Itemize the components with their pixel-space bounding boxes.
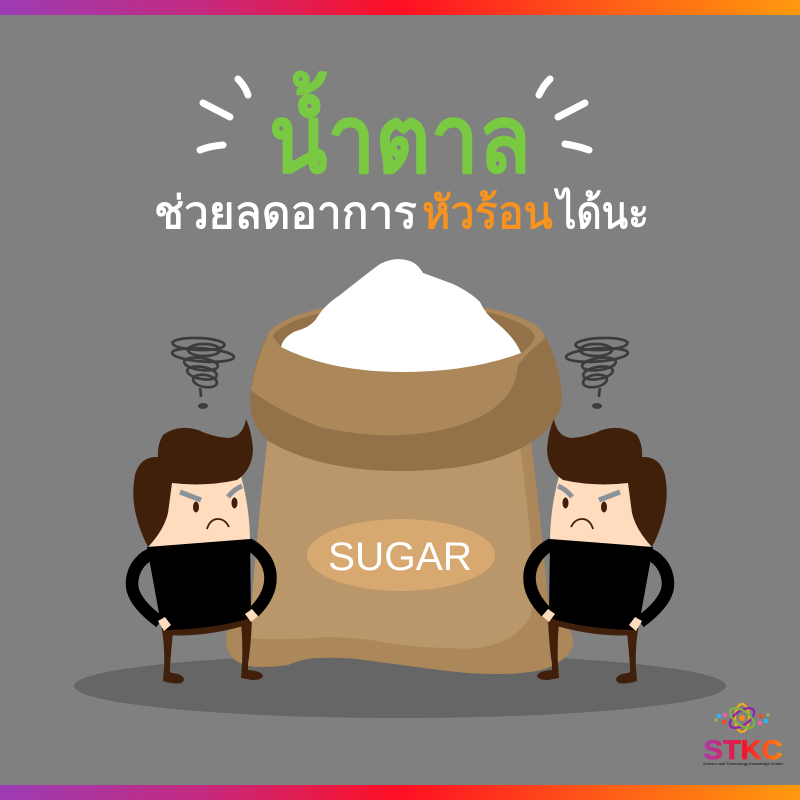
subtitle: ได้นะ <box>554 187 649 238</box>
label <box>307 519 495 591</box>
left man <box>132 337 270 684</box>
top gradient bar <box>0 0 800 15</box>
title rays <box>200 79 589 150</box>
sack light body <box>247 435 534 649</box>
subtitle <box>154 187 649 238</box>
sugar pile <box>281 259 521 372</box>
sugar sack <box>226 259 573 674</box>
ground shadow <box>74 654 726 718</box>
sack lower body <box>226 435 573 674</box>
STKC logo <box>703 704 783 766</box>
sack collar <box>250 335 562 471</box>
right man <box>530 337 668 684</box>
subtitle: ช่วยลดอาการ <box>154 187 417 238</box>
bottom gradient bar <box>0 785 800 800</box>
label text: SUGAR <box>328 535 472 579</box>
subtitle: หัวร้อน <box>422 187 553 238</box>
logo wordmark: STKC <box>704 735 782 765</box>
logo caption: Science and Technology Knowledge Center <box>703 761 783 766</box>
logo atom icon <box>714 704 770 732</box>
sack rim <box>267 308 545 372</box>
title: sugar: น้ำตาล <box>269 72 531 192</box>
